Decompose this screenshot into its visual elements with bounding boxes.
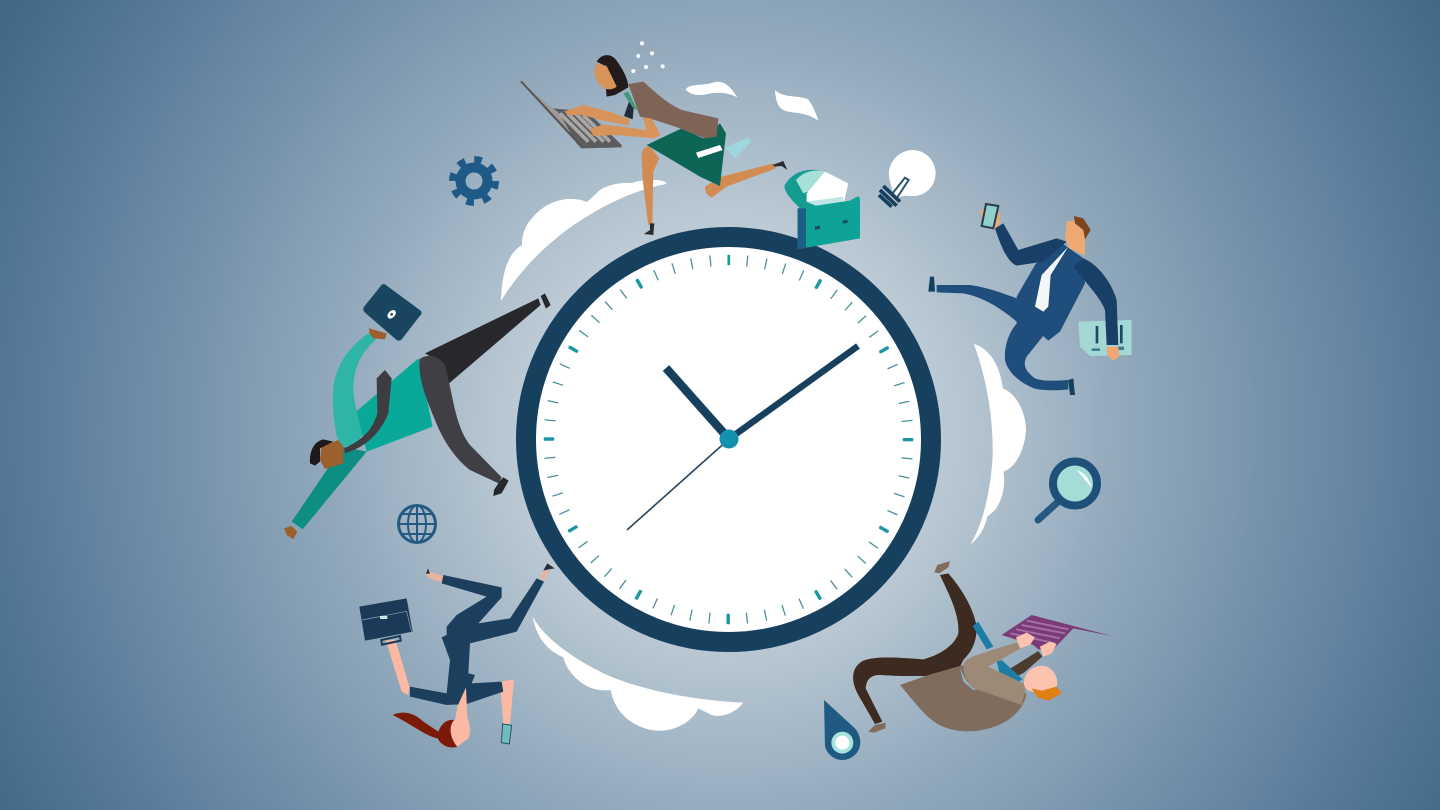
man: hair <box>1074 216 1091 239</box>
man: tie upper <box>973 622 993 649</box>
man: right arm <box>1073 258 1118 345</box>
woman: shoes <box>644 161 787 235</box>
man: shoes <box>493 293 551 496</box>
clock <box>526 237 931 642</box>
woman: jacket <box>628 82 718 138</box>
five-minute ticks <box>549 260 908 619</box>
icon: location drop <box>824 700 860 760</box>
man: shoes <box>868 561 950 733</box>
woman: suit <box>410 575 544 705</box>
icon: globe <box>398 505 436 543</box>
briefcase <box>363 284 422 341</box>
woman: feet <box>425 568 548 582</box>
man: tie <box>1035 247 1068 312</box>
icon: briefcase with papers <box>784 170 860 249</box>
woman: standing leg <box>642 146 659 225</box>
clock ring <box>526 237 931 642</box>
man: far arm <box>292 447 367 529</box>
woman: neck and head <box>450 687 470 747</box>
icon: sweat dots <box>631 41 665 73</box>
running man with briefcase (left) <box>284 284 551 539</box>
woman: dark blouse <box>624 102 634 119</box>
man: torso <box>1017 239 1085 341</box>
man: head <box>1065 220 1085 256</box>
man: shirt <box>960 668 983 690</box>
cloud: bottom <box>533 617 743 731</box>
woman: arm holding case <box>386 639 409 695</box>
man: hand on handle <box>369 328 387 339</box>
man: lower leg <box>1005 323 1068 390</box>
woman: arms <box>564 105 661 138</box>
minute ticks <box>549 260 908 619</box>
woman: collar <box>623 92 637 110</box>
man: trousers <box>853 573 977 724</box>
man: head <box>1024 666 1057 692</box>
icon: gear <box>453 160 495 202</box>
woman: scarf <box>696 145 723 158</box>
scarf tail <box>725 137 752 158</box>
upside-down woman (bottom left) <box>359 563 555 748</box>
icon: magnifying glass <box>1038 462 1097 520</box>
cloud: top left <box>501 180 666 301</box>
woman: skirt <box>647 123 726 186</box>
man: raised sleeve <box>333 333 376 447</box>
briefcase <box>359 598 413 645</box>
man: tie <box>344 370 392 453</box>
woman: arm holding phone <box>500 679 514 724</box>
icon: light bulb <box>879 150 936 207</box>
woman: face <box>594 63 617 89</box>
top figures and objects <box>520 41 936 249</box>
man: back leg <box>937 285 1047 332</box>
man: sleeve <box>963 642 1027 705</box>
man: coat <box>900 665 1027 731</box>
man: hands <box>980 210 1119 361</box>
man: hands <box>1016 633 1057 657</box>
man: hair <box>310 439 333 466</box>
woman: hair <box>597 55 628 97</box>
cloud: right <box>970 344 1026 545</box>
woman: shoes <box>426 563 555 574</box>
woman: hair <box>393 713 457 748</box>
man: tie lower <box>997 660 1023 683</box>
minute hand <box>729 346 858 439</box>
folder <box>1078 320 1132 356</box>
laptop <box>1002 615 1112 649</box>
man: hand <box>284 526 297 539</box>
hour hand <box>666 368 729 439</box>
clock centre <box>720 430 738 448</box>
man: front leg <box>419 356 502 483</box>
man: head <box>320 440 343 469</box>
falling man with laptop (bottom right) <box>853 561 1112 733</box>
man: shoes <box>928 277 1075 395</box>
phone <box>501 724 512 744</box>
man: torso <box>356 358 433 452</box>
woman: back leg <box>705 163 776 198</box>
icon: open laptop <box>520 81 622 148</box>
man: hair <box>1032 687 1062 701</box>
second hand <box>627 439 729 530</box>
running man with phone (right) <box>928 204 1132 395</box>
man: dark sleeve <box>1000 651 1042 678</box>
man: phone arm <box>995 223 1067 266</box>
man: back leg <box>425 298 541 384</box>
phone <box>982 204 998 228</box>
paper: flying sheets <box>686 82 818 121</box>
